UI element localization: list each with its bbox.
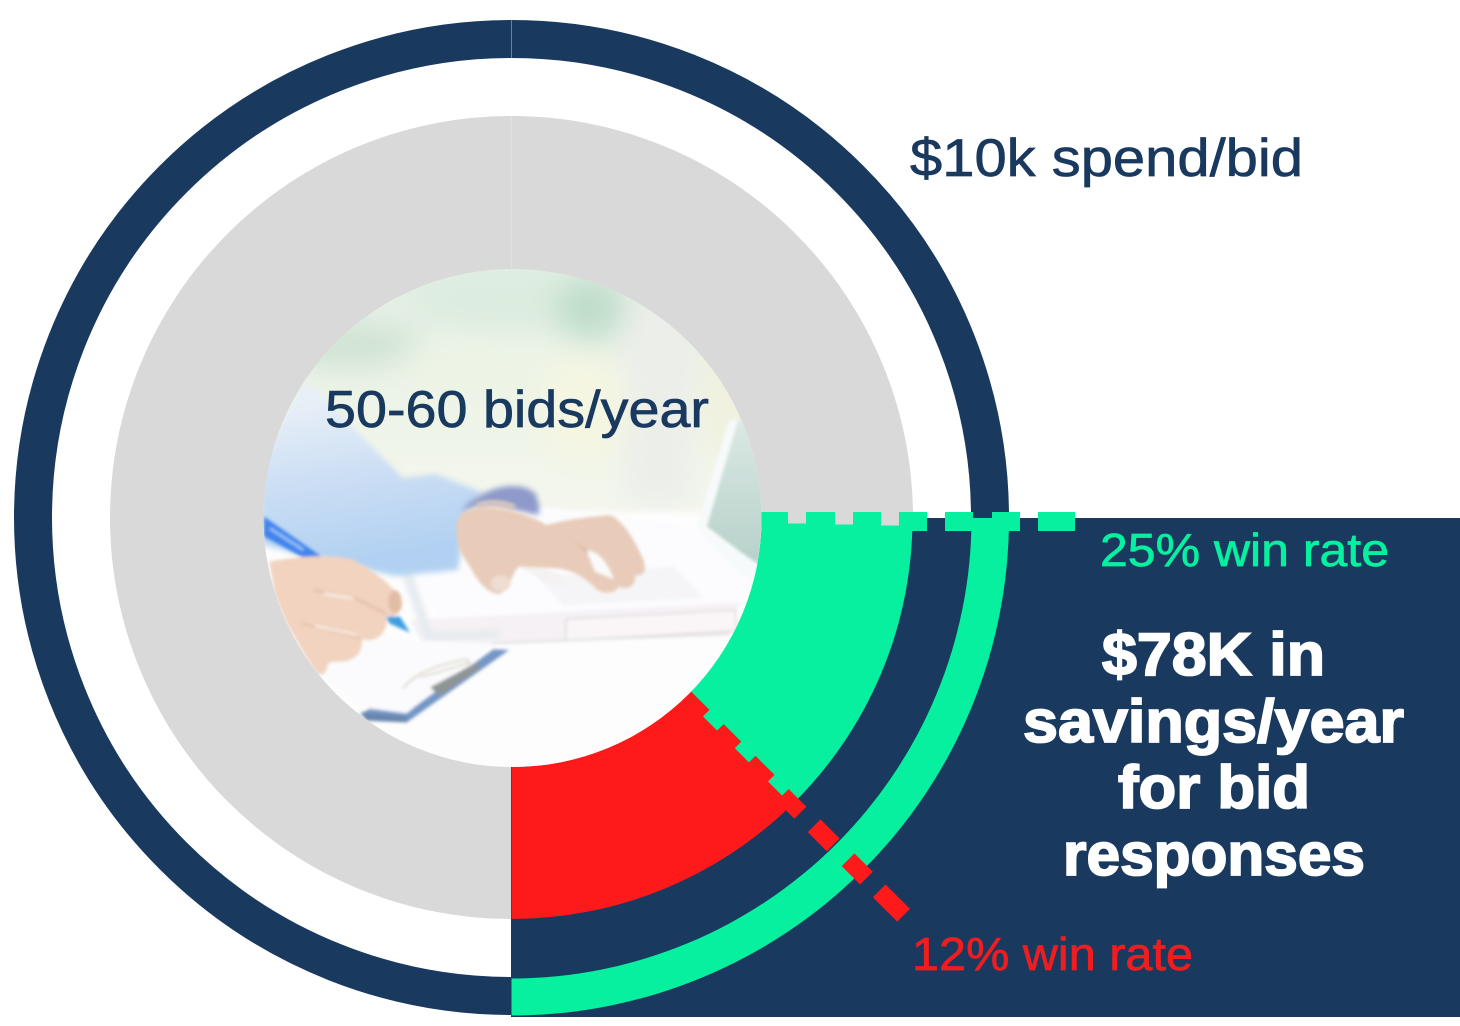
green outer arc: 25% win rate bbox=[512, 518, 1009, 1016]
laptop left edge bbox=[402, 574, 498, 640]
shirt cuff bbox=[462, 486, 539, 515]
green wedge: 25% win rate bbox=[684, 518, 912, 805]
savings headline: responses bbox=[1063, 821, 1365, 888]
savings headline bbox=[1023, 621, 1404, 888]
laptop bbox=[400, 420, 777, 646]
label: bids per year: 50-60 bids/year bbox=[325, 381, 709, 439]
typing hand bbox=[456, 500, 645, 594]
writing hand and pen bbox=[264, 517, 410, 675]
seam lines at top of rings bbox=[510, 20, 512, 268]
gray ring: bids per year bbox=[110, 116, 913, 919]
savings headline: $78K in bbox=[1102, 621, 1325, 688]
label: 25% win rate: 25% win rate bbox=[1100, 524, 1389, 576]
label: spend per bid: $10k spend/bid bbox=[910, 129, 1303, 188]
label: 12% win rate: 12% win rate bbox=[912, 928, 1193, 980]
savings headline: savings/year bbox=[1023, 688, 1404, 755]
outer navy ring: spend per bid bbox=[33, 39, 990, 996]
shirt sleeve bbox=[258, 383, 482, 576]
savings headline: for bid bbox=[1118, 754, 1310, 821]
red wedge: 12% win rate bbox=[512, 698, 792, 919]
clipboard bbox=[358, 642, 510, 725]
green dashed divider bbox=[760, 512, 1075, 531]
navy savings panel bbox=[511, 518, 1460, 1017]
photo: hands writing and typing at a laptop bbox=[250, 266, 780, 782]
white desk bbox=[265, 512, 762, 767]
blurred office background bbox=[313, 274, 734, 438]
gray notches along green dashed line bbox=[788, 517, 899, 526]
red dashed divider bbox=[678, 690, 910, 922]
